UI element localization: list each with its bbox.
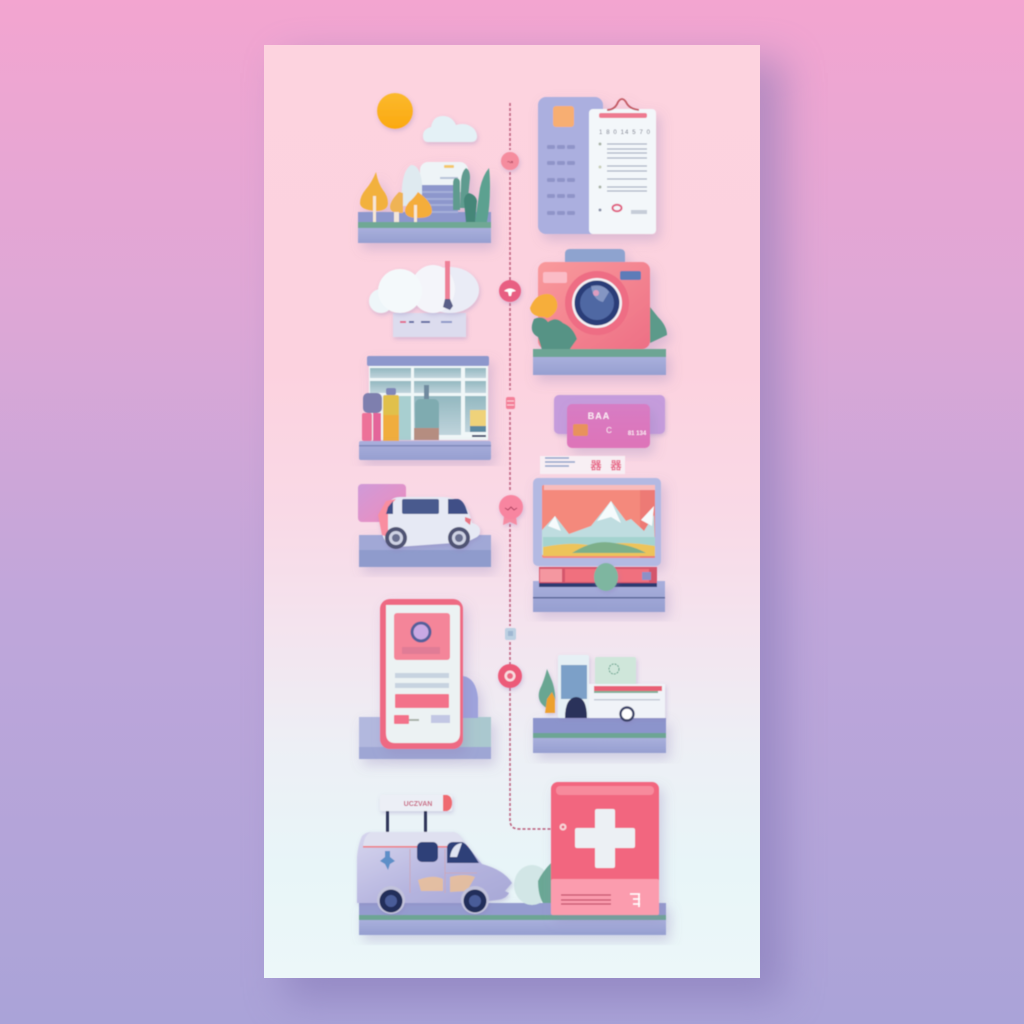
scene: steps and plants on shelf — [358, 162, 491, 243]
section: landscape scene — [358, 93, 491, 243]
form heading: 1 8 0 14 5 7 0 — [599, 130, 651, 136]
node 4 — [499, 495, 523, 525]
illustration: shop window with bottles — [359, 356, 491, 460]
panel: clipboard form — [538, 97, 656, 234]
illustration: camera on shelf — [530, 249, 667, 375]
form lines — [607, 144, 647, 191]
roof sign — [380, 795, 452, 811]
keypad rows — [547, 145, 575, 215]
illustration: cloud with pin — [369, 261, 479, 337]
panel: main card — [264, 45, 760, 978]
node 3 — [506, 397, 515, 409]
node 2 — [499, 280, 521, 302]
node 5 — [505, 628, 516, 640]
label strip: 器 — [590, 459, 602, 472]
icon: cloud — [423, 116, 477, 142]
illustration: phone on shelf — [359, 599, 491, 759]
card: payment: C — [606, 426, 612, 435]
console base — [539, 567, 657, 587]
clipboard clip — [599, 99, 647, 118]
icon: sun — [377, 93, 413, 129]
illustration: van on shelf — [358, 484, 491, 567]
card: payment: 81 134 — [628, 431, 647, 437]
label strip: 器 — [610, 459, 622, 472]
node 1 — [501, 152, 519, 170]
roof sign: UCZVAN — [404, 801, 432, 808]
icon: mug — [573, 424, 588, 436]
illustration: ambulance — [357, 795, 552, 914]
icon: medical cross — [575, 809, 635, 868]
panel: first aid box — [551, 782, 659, 915]
label strip — [540, 456, 625, 474]
lens — [565, 271, 629, 335]
timeline connector — [510, 103, 552, 829]
bottom shelf — [359, 903, 666, 935]
plants — [532, 318, 577, 350]
node 6 — [498, 664, 522, 688]
bottles — [362, 385, 486, 441]
illustration: delivery truck on shelf — [533, 655, 666, 753]
card: payment — [554, 395, 665, 448]
card label: BAA — [588, 411, 610, 421]
van body — [378, 497, 480, 549]
illustration: monitor with mountains — [533, 478, 665, 612]
icon: globe badge — [594, 563, 618, 591]
icon: orange badge — [553, 106, 574, 127]
node 1: ↝ — [507, 159, 513, 166]
